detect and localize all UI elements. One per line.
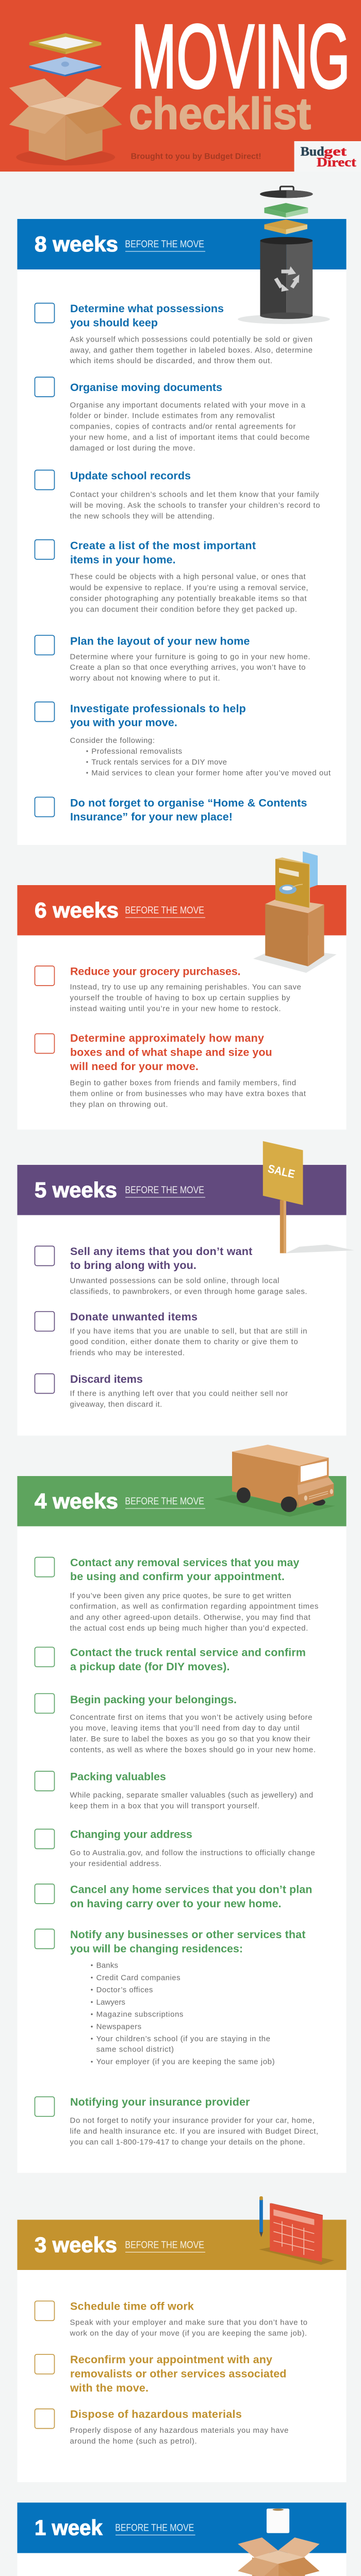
body text: your new home, and a list of important items that could become <box>70 433 309 442</box>
bullet list: services to notify: Doctor’s offices <box>96 1986 153 1994</box>
icon: sale sign: SALE <box>267 1162 296 1181</box>
band: 6 weeks: BEFORE THE MOVE <box>125 905 204 916</box>
body text: Begin to gather boxes from friends and family members, find <box>70 1078 296 1087</box>
heading: investigate professionals: you with your move. <box>70 717 177 729</box>
body text <box>69 572 308 614</box>
bullet list: services to notify: Newspapers <box>96 2023 141 2031</box>
body text: you move, leaving items that you’ll need from day to day until <box>70 1724 299 1733</box>
heading: notifying insurance: Notifying your insurance provider <box>70 2096 250 2108</box>
checkbox <box>35 1884 55 1904</box>
heading: reconfirm appointment: Reconfirm your appointment with any <box>70 2353 272 2366</box>
heading: update school records: Update school records <box>70 470 191 482</box>
body text: they plan on throwing out. <box>70 1100 168 1109</box>
title: checklist: checklist <box>129 89 311 139</box>
panel: 5 weeks before the move <box>18 1141 354 1435</box>
checkbox <box>35 1312 55 1331</box>
body text: which items should be discarded, and throw them out. <box>69 357 272 365</box>
body text: later. Be sure to label the boxes as you go so that you know their <box>70 1735 310 1743</box>
body text: Determine where your furniture is going to go in your new home. <box>70 652 310 662</box>
body text: you can document their condition before they get packed up. <box>70 605 297 614</box>
band: 6 weeks <box>18 885 347 936</box>
checkbox <box>35 2301 55 2320</box>
heading: create a list: Create a list of the most important <box>70 539 256 552</box>
checkbox <box>35 966 55 986</box>
bullet list: services to notify: Banks <box>96 1961 118 1970</box>
body text: If you’ve been given any price quotes, be sure to get written <box>70 1591 291 1600</box>
band: 5 weeks: 5 weeks <box>35 1178 117 1202</box>
checkbox <box>35 1929 55 1948</box>
icon: sale sign <box>263 1141 354 1253</box>
body text <box>70 401 309 453</box>
body text: folder or binder. Include estimates from any removalist <box>70 411 275 420</box>
heading: truck rental: a pickup date (for DIY moves). <box>70 1660 230 1673</box>
bullet list: services to notify: same school district) <box>96 2045 174 2054</box>
body text <box>70 2116 318 2146</box>
heading: determine boxes: boxes and of what shape and size you <box>70 1046 272 1058</box>
band: 3 weeks <box>18 2219 347 2270</box>
body text: them online or from businesses who may have extra boxes that <box>70 1089 306 1098</box>
logo: Budget Direct: Direct <box>317 156 356 170</box>
heading: discard: Discard items <box>70 1373 143 1385</box>
heading: create a list: items in your home. <box>70 553 176 566</box>
body text: Properly dispose of any hazardous materials you may have <box>70 2426 288 2435</box>
bullet list: services to notify: Your children’s school (if you are staying in the <box>96 2035 270 2043</box>
heading: determine possessions: you should keep <box>70 316 158 329</box>
body text: away, and gather them together in labeled boxes. Also, determine <box>70 346 313 354</box>
body text: Contact your children’s schools and let them know that your family <box>70 490 319 499</box>
logo: Budget Direct <box>294 141 361 172</box>
body text: damaged or lost during the move. <box>70 444 195 453</box>
body text: instead waiting until you’re in your new home to restock. <box>70 1005 281 1013</box>
heading: create a list <box>70 539 256 566</box>
body text <box>69 2318 307 2338</box>
bullet list: services to notify: Your employer (if you are keeping the same job) <box>96 2058 275 2066</box>
body text: Go to Australia.gov, and follow the instructions to officially change <box>70 1849 315 1857</box>
body text: worry about not knowing where to put it. <box>69 674 220 683</box>
body text: Concentrate first on items that you won’t be actively using before <box>70 1713 313 1722</box>
heading: donate: Donate unwanted items <box>70 1311 198 1323</box>
checkbox <box>35 540 55 560</box>
body text <box>70 1791 313 1810</box>
checkbox <box>35 1647 55 1667</box>
heading: determine possessions <box>70 302 224 329</box>
heading: notify businesses: Notify any businesses or other services that <box>70 1928 305 1941</box>
checkbox <box>35 797 55 817</box>
heading: begin packing: Begin packing your belongings. <box>70 1693 237 1706</box>
body text: If there is anything left over that you could neither sell nor <box>70 1389 288 1398</box>
body text with bullets: Professional removalists <box>91 747 182 756</box>
heading: determine boxes: will need for your move. <box>70 1060 199 1073</box>
bullet list: services to notify: Lawyers <box>96 1998 125 2007</box>
heading: reconfirm appointment <box>70 2353 286 2394</box>
body text: keep them in a box that you will transport yourself. <box>70 1802 259 1810</box>
body text <box>69 335 313 365</box>
checkbox <box>35 635 55 655</box>
checkbox <box>35 1557 55 1577</box>
body text with bullets: Consider the following: <box>70 736 155 745</box>
body text: yourself the trouble of having to box up certain supplies by <box>70 994 290 1003</box>
icon: grocery bag with cereal and milk <box>253 852 337 973</box>
heading: sell items <box>70 1245 252 1272</box>
heading: packing valuables: Packing valuables <box>70 1771 166 1783</box>
heading: cancel home services: Cancel any home services that you don’t plan <box>70 1884 312 1896</box>
body text: companies, copies of contracts and/or rental agreements for <box>70 422 296 431</box>
body text: Organise any important documents related with your move in a <box>70 401 306 410</box>
icon: moving truck <box>214 1445 335 1517</box>
band: 1 week: 1 week <box>35 2515 103 2540</box>
band: 4 weeks: 4 weeks <box>35 1489 118 1513</box>
icon: calendar and pencil <box>259 2196 334 2265</box>
body text: work on the day of your move (if you are keeping the same job). <box>69 2329 307 2338</box>
heading: sell items: to bring along with you. <box>70 1259 196 1272</box>
band: 5 weeks: BEFORE THE MOVE <box>125 1185 204 1196</box>
heading: determine boxes <box>70 1032 272 1073</box>
checkbox <box>35 1246 55 1266</box>
heading: home and contents insurance <box>70 796 307 823</box>
body text: Create a plan so that once everything arrives, you won’t have to <box>70 663 305 672</box>
body text with bullets: Maid services to clean your former home after you’ve moved out <box>91 769 331 777</box>
heading: reconfirm appointment: removalists or other services associated <box>70 2368 286 2380</box>
body text <box>70 1327 307 1357</box>
panel: 8 weeks before the move <box>18 187 347 845</box>
body text <box>70 1078 306 1109</box>
heading: dispose hazardous: Dispose of hazardous materials <box>70 2408 242 2420</box>
icon: open cardboard box with frame and tablet <box>9 33 122 165</box>
panel: 1 week before the move <box>18 2503 347 2576</box>
heading: notify businesses <box>70 1928 305 1955</box>
body text <box>70 1713 316 1754</box>
checkbox <box>35 2097 55 2116</box>
checkbox <box>35 470 55 489</box>
body text: While packing, separate smaller valuables (such as jewellery) and <box>70 1791 313 1800</box>
body text: good condition, either donate them to charity or give them to <box>70 1337 298 1346</box>
body text <box>70 983 301 1013</box>
band: 1 week: BEFORE THE MOVE <box>115 2522 194 2534</box>
body text: If you have items that you are unable to sell, but that are still in <box>70 1327 307 1336</box>
heading: organise documents: Organise moving documents <box>70 381 222 394</box>
body text <box>70 1389 288 1409</box>
checkbox <box>35 1771 55 1791</box>
body text: These could be objects with a high personal value, or ones that <box>70 572 306 581</box>
checkbox <box>35 377 55 397</box>
band: 1 week <box>18 2503 347 2553</box>
band: 4 weeks: BEFORE THE MOVE <box>125 1496 204 1507</box>
checkbox <box>35 1033 55 1053</box>
heading: reconfirm appointment: with the move. <box>70 2382 149 2394</box>
checkbox <box>35 1829 55 1849</box>
body text: Do not forget to notify your insurance provider for your car, home, <box>70 2116 315 2125</box>
band: 8 weeks: BEFORE THE MOVE <box>125 239 204 250</box>
body text: will be moving. Ask the schools to transfer your children’s record to <box>69 501 320 510</box>
body text <box>69 652 310 683</box>
body text: Ask yourself which possessions could potentially be sold or given <box>70 335 313 344</box>
body text: confirmation, as well as confirmation regarding appointment times <box>70 1602 318 1611</box>
checkbox <box>35 303 55 323</box>
checkbox <box>35 2409 55 2429</box>
body text: Speak with your employer and make sure that you don’t have to <box>70 2318 307 2327</box>
body text: would be expensive to replace. If you’re using a removal service, <box>69 583 308 592</box>
body text: friends who may be interested. <box>70 1348 185 1357</box>
heading: sell items: Sell any items that you don’t want <box>70 1245 252 1258</box>
body text: and any other agreed-upon details. Otherwise, you may find that <box>70 1613 311 1622</box>
band: 4 weeks <box>18 1476 347 1526</box>
tagline: Brought to you by Budget Direct! <box>131 152 261 161</box>
heading: determine boxes: Determine approximately how many <box>70 1032 264 1044</box>
body text <box>70 2426 288 2446</box>
body text with bullets <box>70 736 331 777</box>
body text: your residential address. <box>70 1859 161 1868</box>
body text: consider photographing any potentially breakable items so that <box>70 594 307 603</box>
panel: 3 weeks before the move <box>18 2196 347 2482</box>
heading: notify businesses: you will be changing residences: <box>70 1942 243 1955</box>
bullet list: services to notify <box>91 1961 275 2066</box>
heading: truck rental: Contact the truck rental service and confirm <box>70 1647 306 1659</box>
heading: home and contents insurance: Do not forget to organise “Home & Contents <box>70 796 307 809</box>
header banner <box>0 0 361 172</box>
checkbox <box>35 702 55 721</box>
panel: 6 weeks before the move <box>18 852 347 1129</box>
body text: life and health insurance etc. If you are insured with Budget Direct, <box>70 2127 318 2136</box>
body text: Unwanted possessions can be sold online, through local <box>70 1277 280 1285</box>
body text: you can call 1-800-179-417 to change your details on the phone. <box>70 2138 305 2146</box>
heading: contact removal services: Contact any removal services that you may <box>70 1556 299 1569</box>
heading: home and contents insurance: Insurance” for your new place! <box>70 811 233 823</box>
heading: contact removal services <box>70 1556 299 1583</box>
checkbox <box>35 1693 55 1713</box>
body text <box>70 1591 318 1633</box>
heading: investigate professionals <box>70 702 246 729</box>
heading: truck rental <box>70 1647 306 1673</box>
body text: the new schools they will be attending. <box>70 512 215 520</box>
band: 3 weeks: BEFORE THE MOVE <box>125 2240 204 2250</box>
band: 8 weeks <box>18 219 347 269</box>
band: 5 weeks <box>18 1165 347 1215</box>
body text: giveaway, then discard it. <box>70 1400 162 1409</box>
body text: around the home (such as petrol). <box>70 2437 197 2446</box>
heading: changing address: Changing your address <box>70 1828 192 1841</box>
checkbox <box>35 1374 55 1393</box>
band: 8 weeks: 8 weeks <box>35 232 118 256</box>
panel: 4 weeks before the move <box>18 1445 347 2173</box>
body text <box>70 1849 315 1868</box>
heading: cancel home services: on having carry over to your new home. <box>70 1897 282 1910</box>
body text <box>69 490 320 520</box>
body text with bullets: Truck rentals services for a DIY move <box>91 758 227 767</box>
heading: determine possessions: Determine what possessions <box>70 302 224 315</box>
heading: reduce grocery purchases: Reduce your grocery purchases. <box>70 965 240 977</box>
body text: the actual cost ends up being much higher than you’d expected. <box>70 1624 308 1633</box>
body text: classifieds, to pawnbrokers, or even through home garage sales. <box>70 1287 307 1296</box>
heading: cancel home services <box>70 1884 312 1910</box>
checkbox <box>35 2354 55 2374</box>
heading: plan the layout: Plan the layout of your new home <box>70 635 250 647</box>
body text: contents, as well as where the boxes should go in your new home. <box>70 1745 316 1754</box>
band: 3 weeks: 3 weeks <box>35 2233 117 2257</box>
heading: investigate professionals: Investigate professionals to help <box>70 702 246 715</box>
icon: recycling bin with books <box>238 187 330 324</box>
logo: Budget Direct: Bud <box>301 145 324 159</box>
bullet list: services to notify: Credit Card companies <box>96 1973 180 1982</box>
heading: schedule time off: Schedule time off work <box>70 2300 194 2313</box>
logo: Budget Direct: get <box>324 145 347 159</box>
bullet list: services to notify: Magazine subscriptions <box>96 2010 183 2019</box>
icon: toilet roll and open box <box>238 2509 320 2576</box>
band: 6 weeks: 6 weeks <box>35 898 119 922</box>
body text: Instead, try to use up any remaining perishables. You can save <box>70 983 301 992</box>
body text <box>70 1277 307 1296</box>
heading: contact removal services: be using and confirm your appointment. <box>70 1570 285 1583</box>
